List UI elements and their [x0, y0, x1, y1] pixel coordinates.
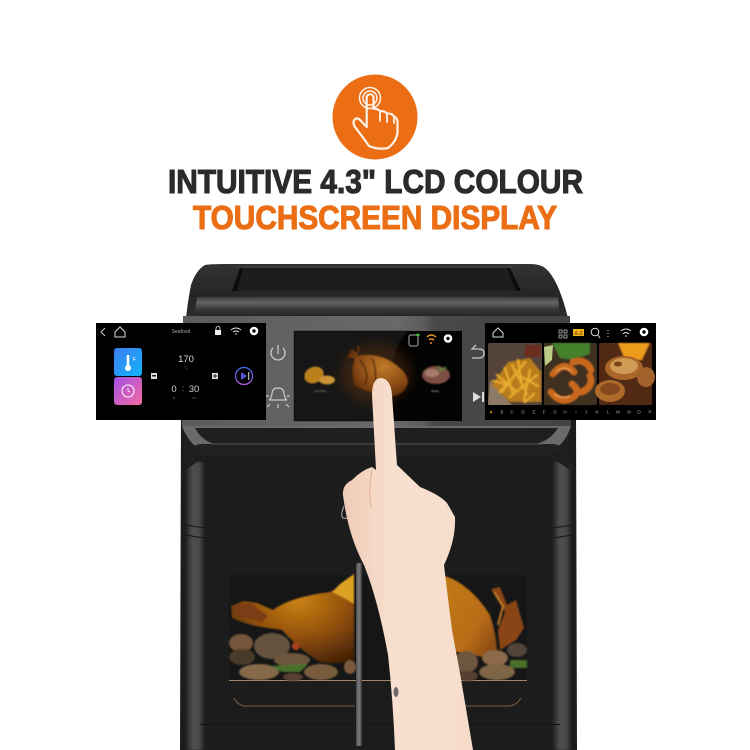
title: TOUCHSCREEN DISPLAY — [193, 199, 557, 236]
minus button — [151, 373, 157, 379]
left screen top bar — [101, 326, 257, 337]
roast chicken — [347, 346, 408, 397]
temperature tile — [114, 348, 142, 376]
right screen top bar — [493, 328, 647, 338]
fryer body — [180, 410, 577, 750]
power icon — [271, 345, 285, 360]
alphabet index — [489, 410, 652, 414]
back icon — [472, 345, 484, 358]
right screen: recipe browser — [485, 323, 656, 420]
alphabet index: G — [553, 410, 557, 414]
recipe card: prawns — [544, 343, 597, 405]
nuggets: Air Fried — [314, 389, 326, 393]
play pause icon — [473, 392, 484, 402]
alphabet index: H — [563, 410, 567, 414]
timer tile — [114, 377, 142, 405]
time value: 0 — [171, 384, 177, 395]
right screen top bar: A-Z — [574, 331, 583, 337]
alphabet index: K — [595, 410, 599, 414]
time value: 30 — [189, 384, 199, 395]
alphabet index: D — [521, 410, 525, 414]
control panel — [182, 316, 571, 458]
steak: Steak — [431, 389, 439, 393]
alphabet index: O — [637, 410, 641, 414]
alphabet index: M — [616, 410, 620, 414]
alphabet index: J — [585, 410, 587, 414]
title — [168, 163, 583, 236]
alphabet index: N — [627, 410, 631, 414]
plus button — [212, 373, 218, 379]
alphabet index: B — [500, 410, 504, 414]
icon: orange touch badge — [332, 74, 418, 160]
centre screen status icons — [409, 334, 451, 346]
time value: h — [173, 395, 175, 400]
alphabet index: E — [532, 410, 536, 414]
steak — [422, 366, 450, 393]
cooking window — [229, 378, 527, 750]
temperature tile: F — [133, 357, 136, 363]
whole chicken left — [231, 574, 354, 663]
time value — [171, 384, 199, 400]
left screen: temperature and timer — [96, 323, 266, 420]
time value: : — [182, 384, 184, 393]
play button — [236, 368, 252, 384]
temperature value — [178, 354, 194, 370]
centre touchscreen — [266, 331, 484, 421]
light icon — [266, 388, 290, 408]
fryer lid — [186, 264, 568, 318]
alphabet index: C — [510, 410, 514, 414]
recipe card: egg tarts — [595, 343, 655, 405]
time value: m — [192, 395, 196, 400]
title: INTUITIVE 4.3" LCD COLOUR — [168, 163, 583, 200]
whole chicken right — [445, 576, 524, 660]
alphabet index: P — [648, 410, 652, 414]
recipe card: fries — [488, 343, 542, 405]
hand touching the screen — [343, 378, 473, 750]
alphabet index: L — [607, 410, 610, 414]
temperature value: 170 — [178, 354, 194, 365]
left screen top bar: Seafood — [172, 329, 191, 335]
alphabet index: F — [543, 410, 546, 414]
centre handle — [356, 563, 362, 746]
air fryer — [96, 264, 656, 750]
temperature value: °C — [184, 365, 188, 370]
nuggets — [302, 364, 335, 393]
alphabet index: I — [575, 410, 577, 414]
alphabet index: A — [489, 410, 493, 414]
roast potatoes — [229, 633, 527, 681]
brand logo mark — [342, 506, 349, 518]
